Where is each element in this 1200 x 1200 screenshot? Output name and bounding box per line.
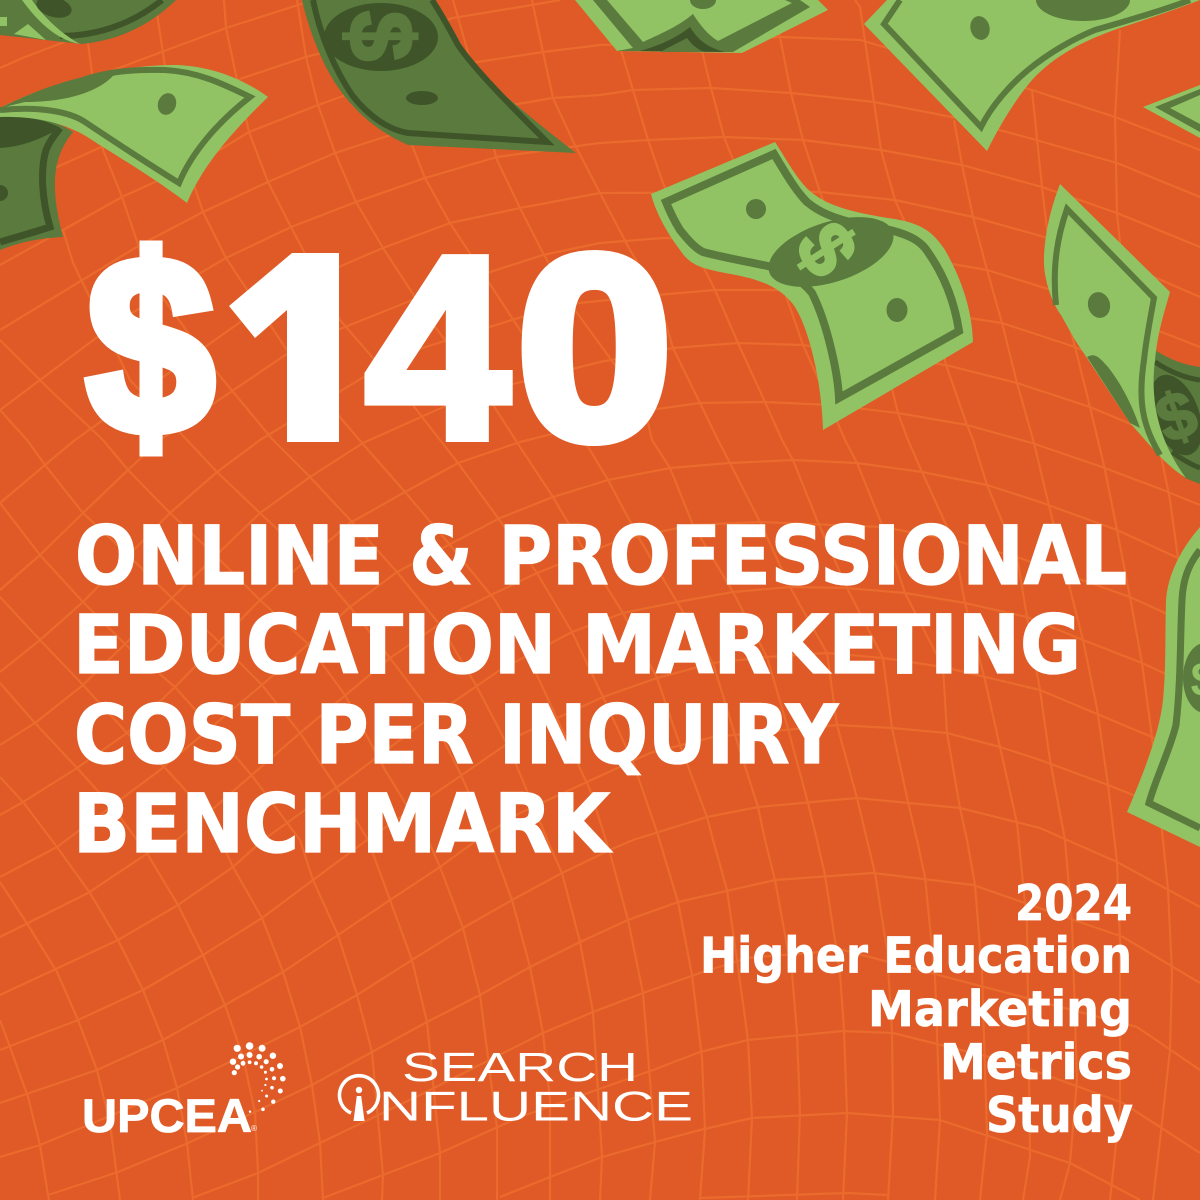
big number: $140: $ [87, 206, 214, 485]
icon: dollar bill, top right [864, 0, 1200, 151]
big number: $140: 4 [365, 204, 511, 494]
logo: UPCEA [82, 1042, 286, 1142]
big number: $140: 1 [235, 204, 380, 494]
headline: COST PER INQUIRY [74, 689, 839, 783]
icon: dollar bill, lower right edge [1127, 527, 1200, 847]
icon: dollar bill corner, right edge [1143, 85, 1200, 138]
icon: wavy dollar bill, centre right [651, 142, 973, 430]
headline: BENCHMARK [73, 778, 613, 872]
study title: Study [986, 1087, 1133, 1144]
icon: curling dollar bill, upper left [0, 65, 268, 203]
icon: wavy dollar bill, centre right: $ [778, 207, 876, 291]
logo: UPCEA: ® [251, 1124, 257, 1133]
study title: Metrics [940, 1034, 1132, 1091]
big number: $140: 0 [517, 204, 672, 494]
icon: dark dollar bill, top middle: $ [330, 11, 430, 61]
headline [73, 510, 1127, 872]
icon: dollar bill underside, left edge [0, 114, 73, 250]
icon: dark dollar bill, top middle [302, 0, 576, 153]
icon: dollar bill, top centre [575, 0, 828, 53]
headline: EDUCATION MARKETING [73, 599, 1081, 693]
study title: Marketing [868, 981, 1132, 1038]
logo: Search Influence: SEARCH [402, 1044, 638, 1090]
study title [700, 875, 1133, 1144]
logo: UPCEA: UPCEA [82, 1089, 252, 1142]
logo: Search Influence [339, 1044, 693, 1130]
icon: dollar bill, top-left corner [0, 0, 176, 44]
big number: $140 [84, 240, 667, 456]
study title: Higher Education [700, 928, 1132, 984]
study title: 2024 [1015, 875, 1132, 932]
icon: curling dollar bill, right side [1044, 184, 1200, 484]
logo: Search Influence: NFLUENCE [379, 1082, 693, 1130]
